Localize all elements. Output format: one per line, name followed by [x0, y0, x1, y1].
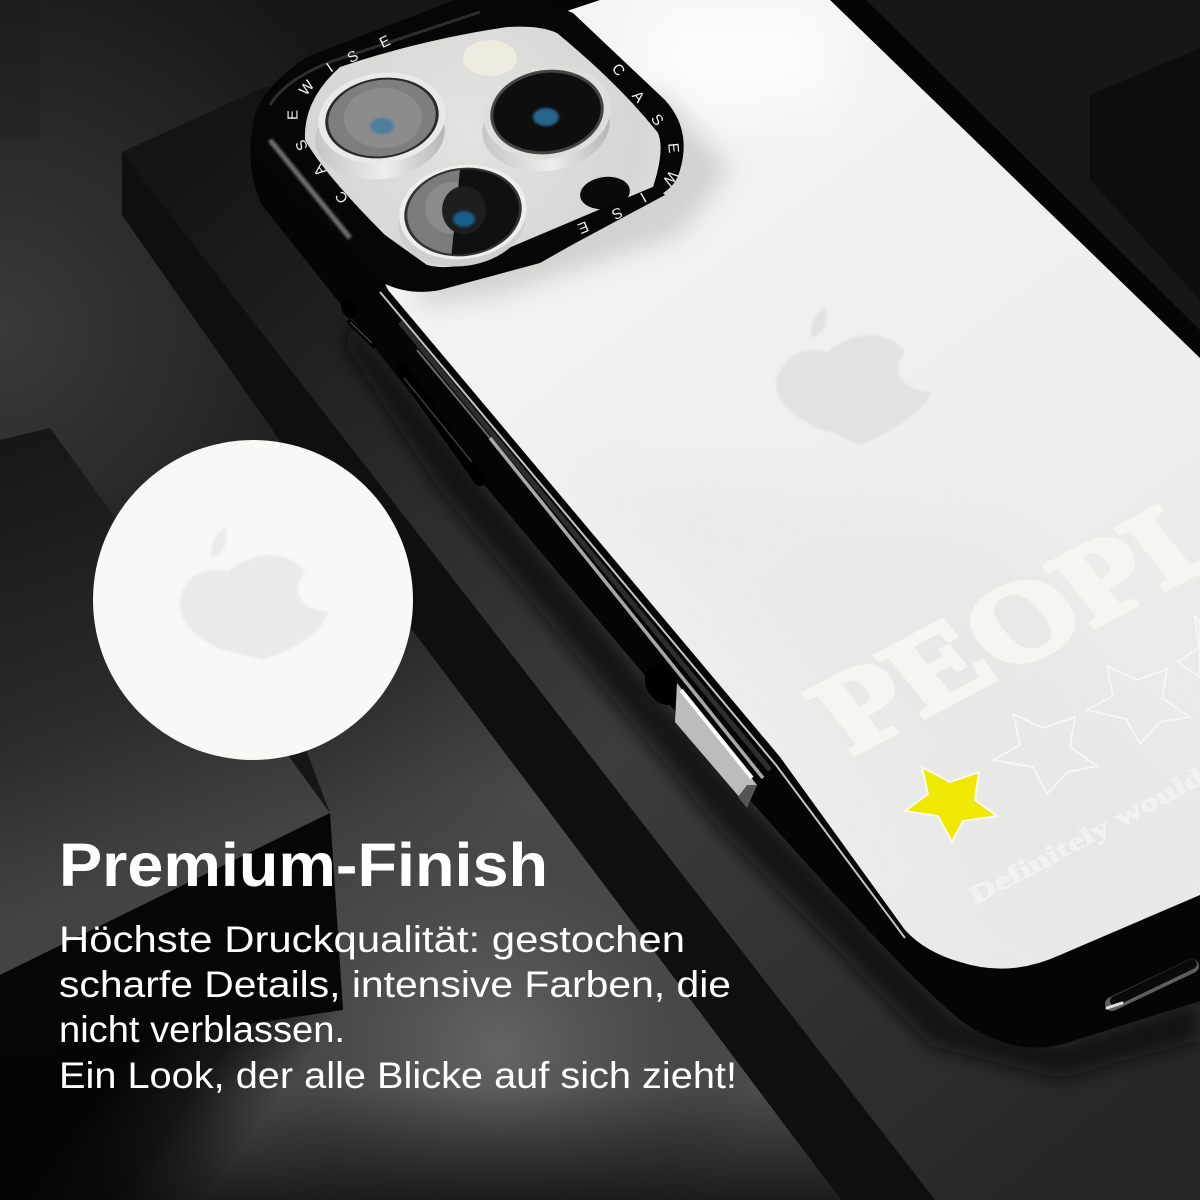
camera block [253, 0, 684, 292]
lower step surfaces [154, 630, 841, 1200]
slot: mute switch [338, 297, 375, 347]
body text: nicht verblassen. [59, 1009, 345, 1050]
camera glass [305, 27, 661, 267]
apple logo in circle [180, 526, 328, 660]
bumper lettering [284, 32, 682, 237]
bumper translucent stripe [270, 140, 350, 238]
phone shadow [345, 320, 1200, 1078]
bumper lettering: W [296, 76, 319, 99]
bumper band over sensor [530, 186, 665, 262]
slot: volume buttons [402, 370, 480, 480]
lens upper left [310, 65, 452, 188]
bumper lettering: S [292, 137, 312, 153]
body text [59, 919, 737, 1096]
bumper lettering: C [608, 60, 628, 80]
bumper lettering: I [323, 60, 337, 76]
phone case [250, 0, 1200, 1048]
bumper lettering: E [664, 142, 682, 154]
yellow star [905, 767, 997, 842]
bumper lettering: C [332, 187, 352, 207]
side button [637, 658, 757, 808]
bumper lettering: S [609, 203, 625, 223]
detail circle with apple logo [93, 440, 413, 760]
body text: Ein Look, der alle Blicke auf sich zieht! [59, 1055, 737, 1096]
bumper lettering: W [658, 167, 681, 189]
phone back [300, 0, 1200, 969]
bumper lettering: S [345, 47, 361, 67]
flash [463, 40, 517, 76]
printed caption: Definitely would [963, 761, 1200, 910]
body text: Höchste Druckqualität: gestochen [59, 919, 685, 960]
apple logo on phone [776, 306, 932, 445]
bumper lettering: E [284, 110, 302, 120]
bumper lettering: A [310, 161, 330, 179]
camera bumper [253, 0, 684, 292]
bumper lettering: A [628, 88, 648, 106]
bumper lettering: I [637, 189, 649, 205]
lens upper right [476, 57, 617, 179]
sensor hole [578, 174, 632, 212]
charging port [1107, 964, 1192, 1008]
bumper lettering: E [377, 32, 393, 52]
bumper lettering: E [575, 217, 591, 237]
side reflection stripes [380, 292, 905, 938]
title: Premium-Finish [59, 831, 548, 899]
bumper lettering: S [647, 111, 667, 129]
left block [0, 428, 343, 1200]
body text: scharfe Details, intensive Farben, die [59, 964, 731, 1005]
bumper rim highlight [270, 12, 480, 105]
lens bottom [398, 164, 526, 266]
outline stars [993, 616, 1200, 794]
